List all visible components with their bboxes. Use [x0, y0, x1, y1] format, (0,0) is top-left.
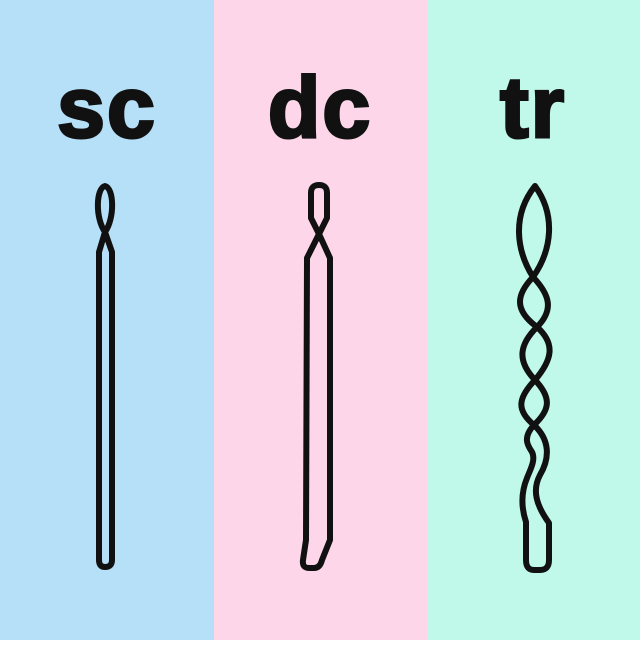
icon: sc stitch: [98, 186, 112, 567]
panel: sc background: [0, 0, 214, 640]
heading: tr: tr: [500, 60, 566, 156]
panel: tr background: [427, 0, 640, 640]
panel: dc background: [214, 0, 427, 640]
icon: dc stitch: [303, 185, 330, 568]
icon: tr stitch: [519, 186, 550, 570]
heading: sc: sc: [57, 60, 157, 156]
heading: dc: dc: [268, 60, 372, 156]
